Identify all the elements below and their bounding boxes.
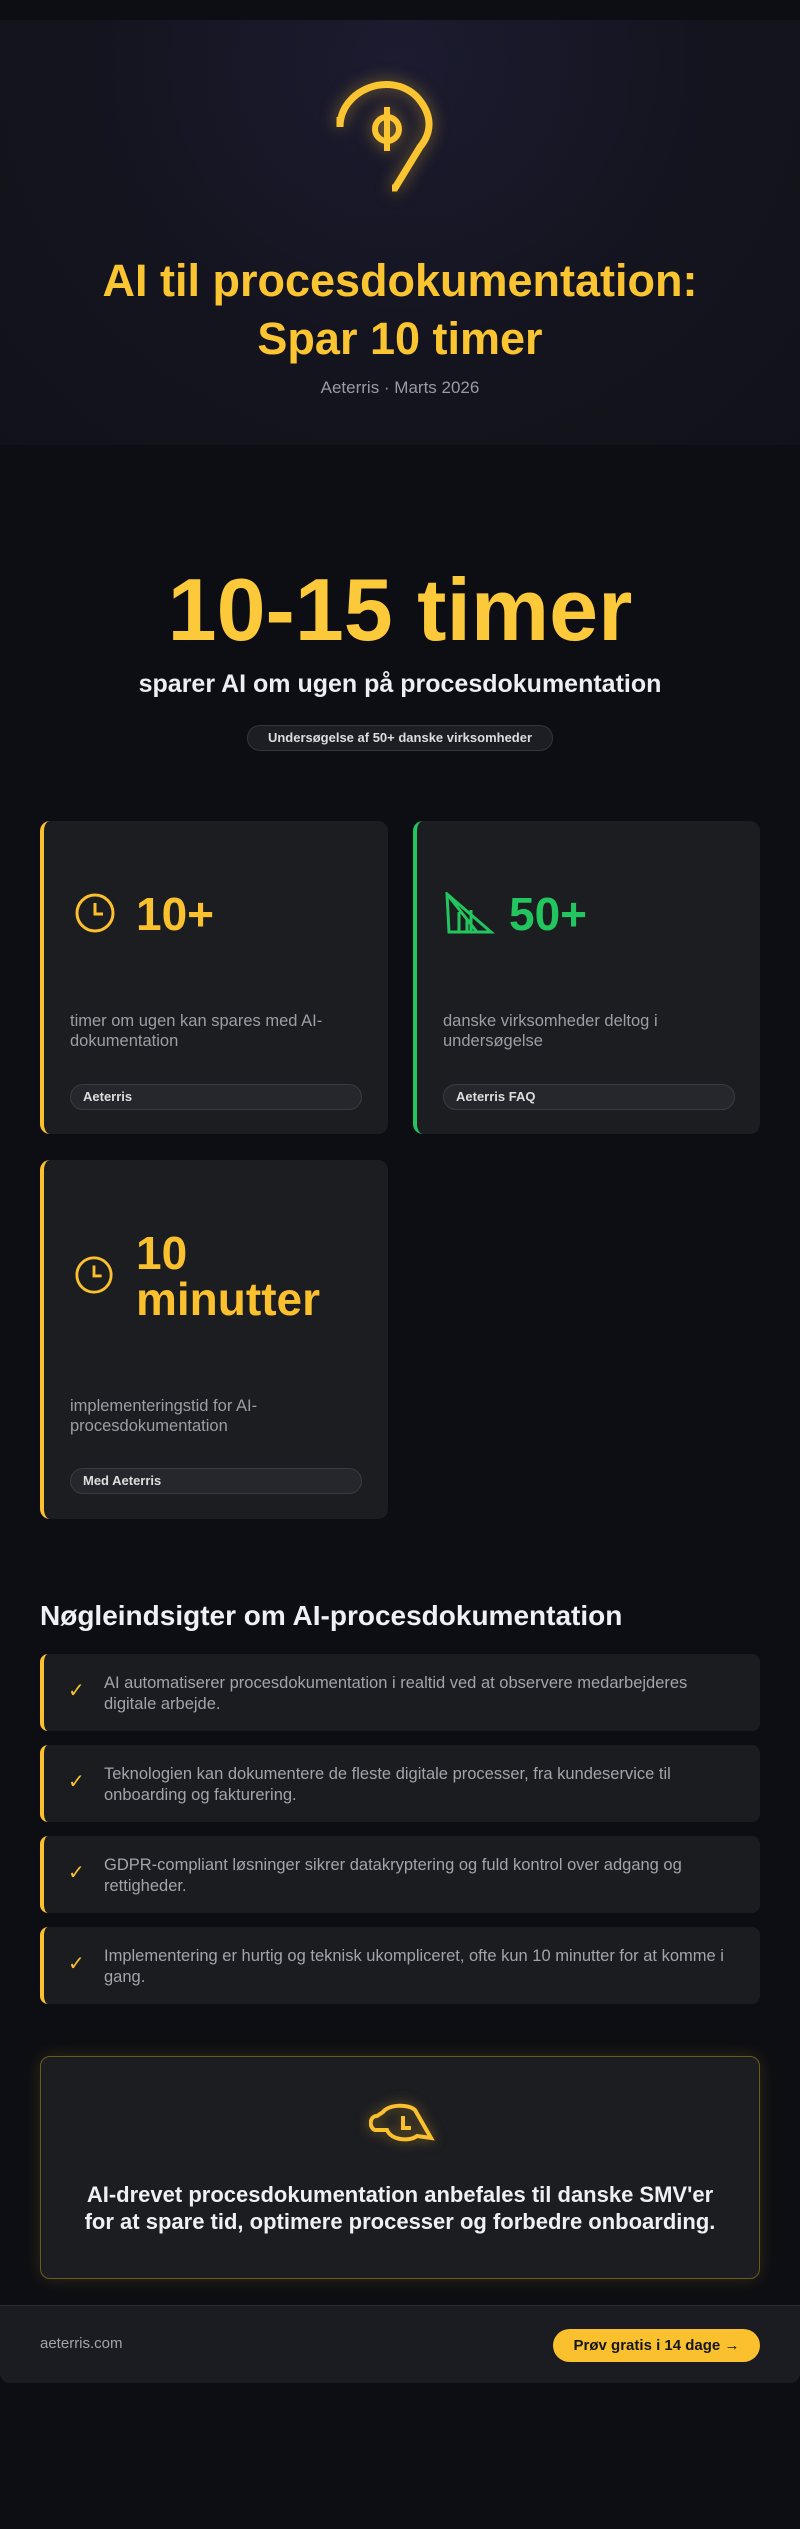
pill: source: Med Aeterris xyxy=(83,1473,161,1488)
pill: source: Aeterris FAQ xyxy=(456,1089,535,1104)
title: Spar 10 timer xyxy=(257,313,543,364)
description: implementeringstid for AI-procesdokumentation xyxy=(70,1397,257,1435)
hero stat: 10-15 timer xyxy=(168,560,632,659)
conclusion text: for at spare tid, optimere processer og forbedre onboarding. xyxy=(85,2209,715,2234)
insight 4 xyxy=(40,1927,760,2004)
insight 3: GDPR-compliant løsninger sikrer datakryptering og fuld kontrol over adgang og rettigheder. xyxy=(104,1856,682,1895)
insight 3 xyxy=(40,1836,760,1913)
pill: source xyxy=(70,1084,362,1110)
badge: Undersøgelse af 50+ danske virksomheder xyxy=(268,730,532,745)
insight 2: Teknologien kan dokumentere de fleste digitale processer, fra kundeservice til onboarding og fakturering. xyxy=(104,1765,671,1804)
title xyxy=(102,255,698,364)
pill: source: Aeterris xyxy=(83,1089,132,1104)
icon: conclusion xyxy=(363,2097,438,2148)
title: AI til procesdokumentation: xyxy=(102,255,698,306)
card: 10+ xyxy=(40,821,388,1134)
insight 4: ✓ xyxy=(68,1953,85,1975)
header band xyxy=(0,20,800,445)
insight 2: ✓ xyxy=(68,1771,85,1793)
number: 10+ xyxy=(136,888,214,940)
cta button: Prøv gratis i 14 dage → xyxy=(574,2337,739,2354)
card: 50+ xyxy=(413,821,760,1134)
number: 10 xyxy=(136,1227,187,1279)
footer xyxy=(0,2305,800,2383)
insight 1: ✓ xyxy=(68,1680,85,1702)
cta button xyxy=(553,2329,760,2362)
number xyxy=(136,1227,320,1325)
conclusion text xyxy=(85,2182,715,2234)
conclusion text: AI-drevet procesdokumentation anbefales til danske SMV'er xyxy=(87,2182,713,2207)
conclusion box xyxy=(40,2056,760,2279)
card: 10 minutter xyxy=(40,1160,388,1519)
icon: chart xyxy=(445,892,495,934)
pill: source xyxy=(70,1468,362,1494)
pill: source xyxy=(443,1084,735,1110)
number: minutter xyxy=(136,1273,320,1325)
footer url: aeterris.com xyxy=(40,2335,123,2352)
badge xyxy=(247,725,553,751)
icon: logo xyxy=(328,72,442,198)
insight 1: AI automatiserer procesdokumentation i realtid ved at observere medarbejderes digitale arbejde. xyxy=(104,1674,687,1713)
insight 2 xyxy=(40,1745,760,1822)
subtitle: Aeterris · Marts 2026 xyxy=(321,378,479,397)
description: danske virksomheder deltog i undersøgelse xyxy=(443,1012,658,1050)
description: timer om ugen kan spares med AI-dokumentation xyxy=(70,1012,322,1050)
number: 50+ xyxy=(509,888,587,940)
heading: insights: Nøgleindsigter om AI-procesdokumentation xyxy=(40,1600,622,1631)
insight 3: ✓ xyxy=(68,1862,85,1884)
insight 1 xyxy=(40,1654,760,1731)
icon: clock xyxy=(75,1256,113,1294)
icon: clock xyxy=(76,894,114,932)
hero text: sparer AI om ugen på procesdokumentation xyxy=(139,670,661,698)
insight 4: Implementering er hurtig og teknisk ukompliceret, ofte kun 10 minutter for at komme i gang. xyxy=(104,1947,724,1986)
